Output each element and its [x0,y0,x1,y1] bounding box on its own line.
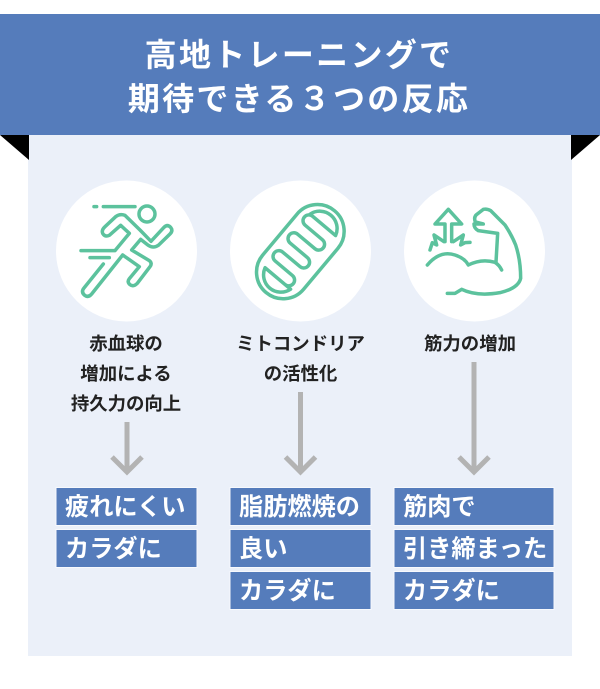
result boxes: 良い [239,536,287,563]
arrow [112,422,142,472]
result boxes: 引き締まった [403,536,547,563]
arrow [459,362,489,472]
icon: runner [56,180,197,322]
ribbon fold right [571,135,600,160]
result boxes: カラダに [239,577,336,605]
icon: flexed arm [404,180,545,322]
result boxes: 脂肪燃焼の [239,494,360,521]
result boxes: 筋肉で [403,494,476,521]
result boxes: カラダに [65,535,162,563]
result boxes [230,488,371,610]
result boxes: 疲れにくい [65,494,185,521]
title banner [0,14,600,135]
label [236,333,365,384]
label [71,333,181,414]
label: 赤血球の [89,333,163,354]
column 1: red blood cells [56,180,197,568]
column 3: muscle [394,180,554,610]
result boxes: カラダに [403,577,500,605]
ribbon fold left [0,135,29,160]
label: ミトコンドリア [236,333,365,354]
arrow [286,392,316,472]
column 2: mitochondria [230,180,371,610]
label: 筋力の増加 [424,333,516,354]
label: 増加による [80,363,172,384]
icon: mitochondrion [230,180,371,322]
title banner: 高地トレーニングで [145,37,453,73]
label: 持久力の向上 [71,393,181,414]
result boxes [394,488,554,610]
panel: background [28,135,572,656]
result boxes [56,488,197,568]
label: の活性化 [264,363,337,384]
title banner: 期待できる３つの反応 [128,81,470,117]
